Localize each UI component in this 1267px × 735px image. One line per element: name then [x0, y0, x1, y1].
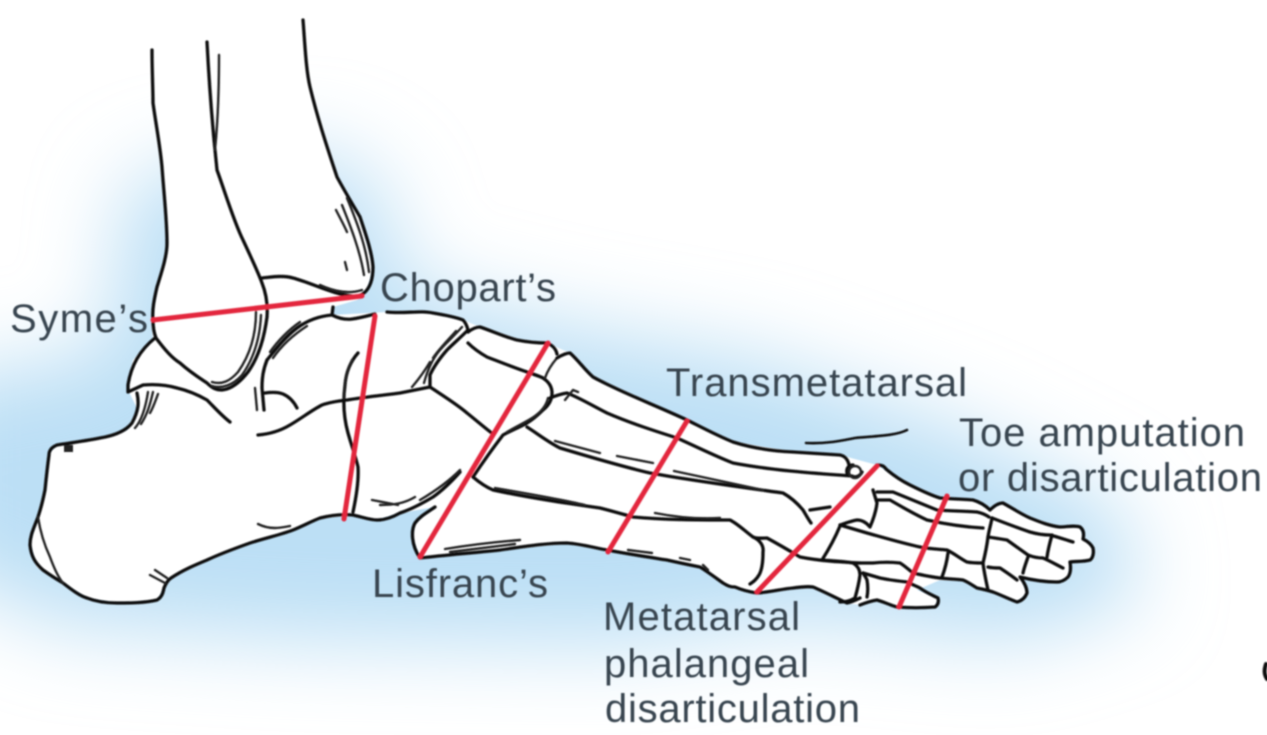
label: Metatarsal phalangeal disarticulation: Metatarsal [603, 595, 800, 639]
label: Metatarsal phalangeal disarticulation: disarticulation [605, 687, 860, 731]
bones: heel and talus [30, 307, 493, 603]
label: Chopart's: Chopart’s [380, 266, 556, 310]
red amputation level lines [153, 296, 947, 607]
label: Toe amputation or disarticulation: Toe amputation [959, 411, 1245, 455]
black mark at right edge [1265, 664, 1267, 679]
line: Syme's level [153, 296, 362, 320]
bones: midfoot [387, 312, 557, 477]
foot silhouette [30, 20, 1093, 607]
bones: metatarsals [412, 353, 860, 603]
bones: leg [152, 20, 373, 390]
label: Metatarsal phalangeal disarticulation [603, 595, 860, 731]
label: Toe amputation or disarticulation [958, 411, 1262, 500]
label: Syme's: Syme’s [10, 297, 148, 341]
label: Metatarsal phalangeal disarticulation: phalangeal [604, 642, 809, 686]
line: metatarsal phalangeal level [757, 466, 877, 592]
line: Lisfranc's level [420, 343, 548, 557]
labels [10, 266, 1262, 731]
line: Chopart's level [344, 316, 375, 519]
line: transmetatarsal level [608, 421, 687, 552]
label: Toe amputation or disarticulation: or disarticulation [958, 456, 1262, 500]
bones: toes [810, 465, 1093, 608]
label: Lisfranc's: Lisfranc’s [372, 562, 548, 606]
hand-drawn black stroke [806, 430, 907, 443]
background: blue glow around foot [0, 150, 1140, 645]
label: Transmetatarsal: Transmetatarsal [666, 361, 967, 405]
line: toe level [899, 496, 947, 607]
